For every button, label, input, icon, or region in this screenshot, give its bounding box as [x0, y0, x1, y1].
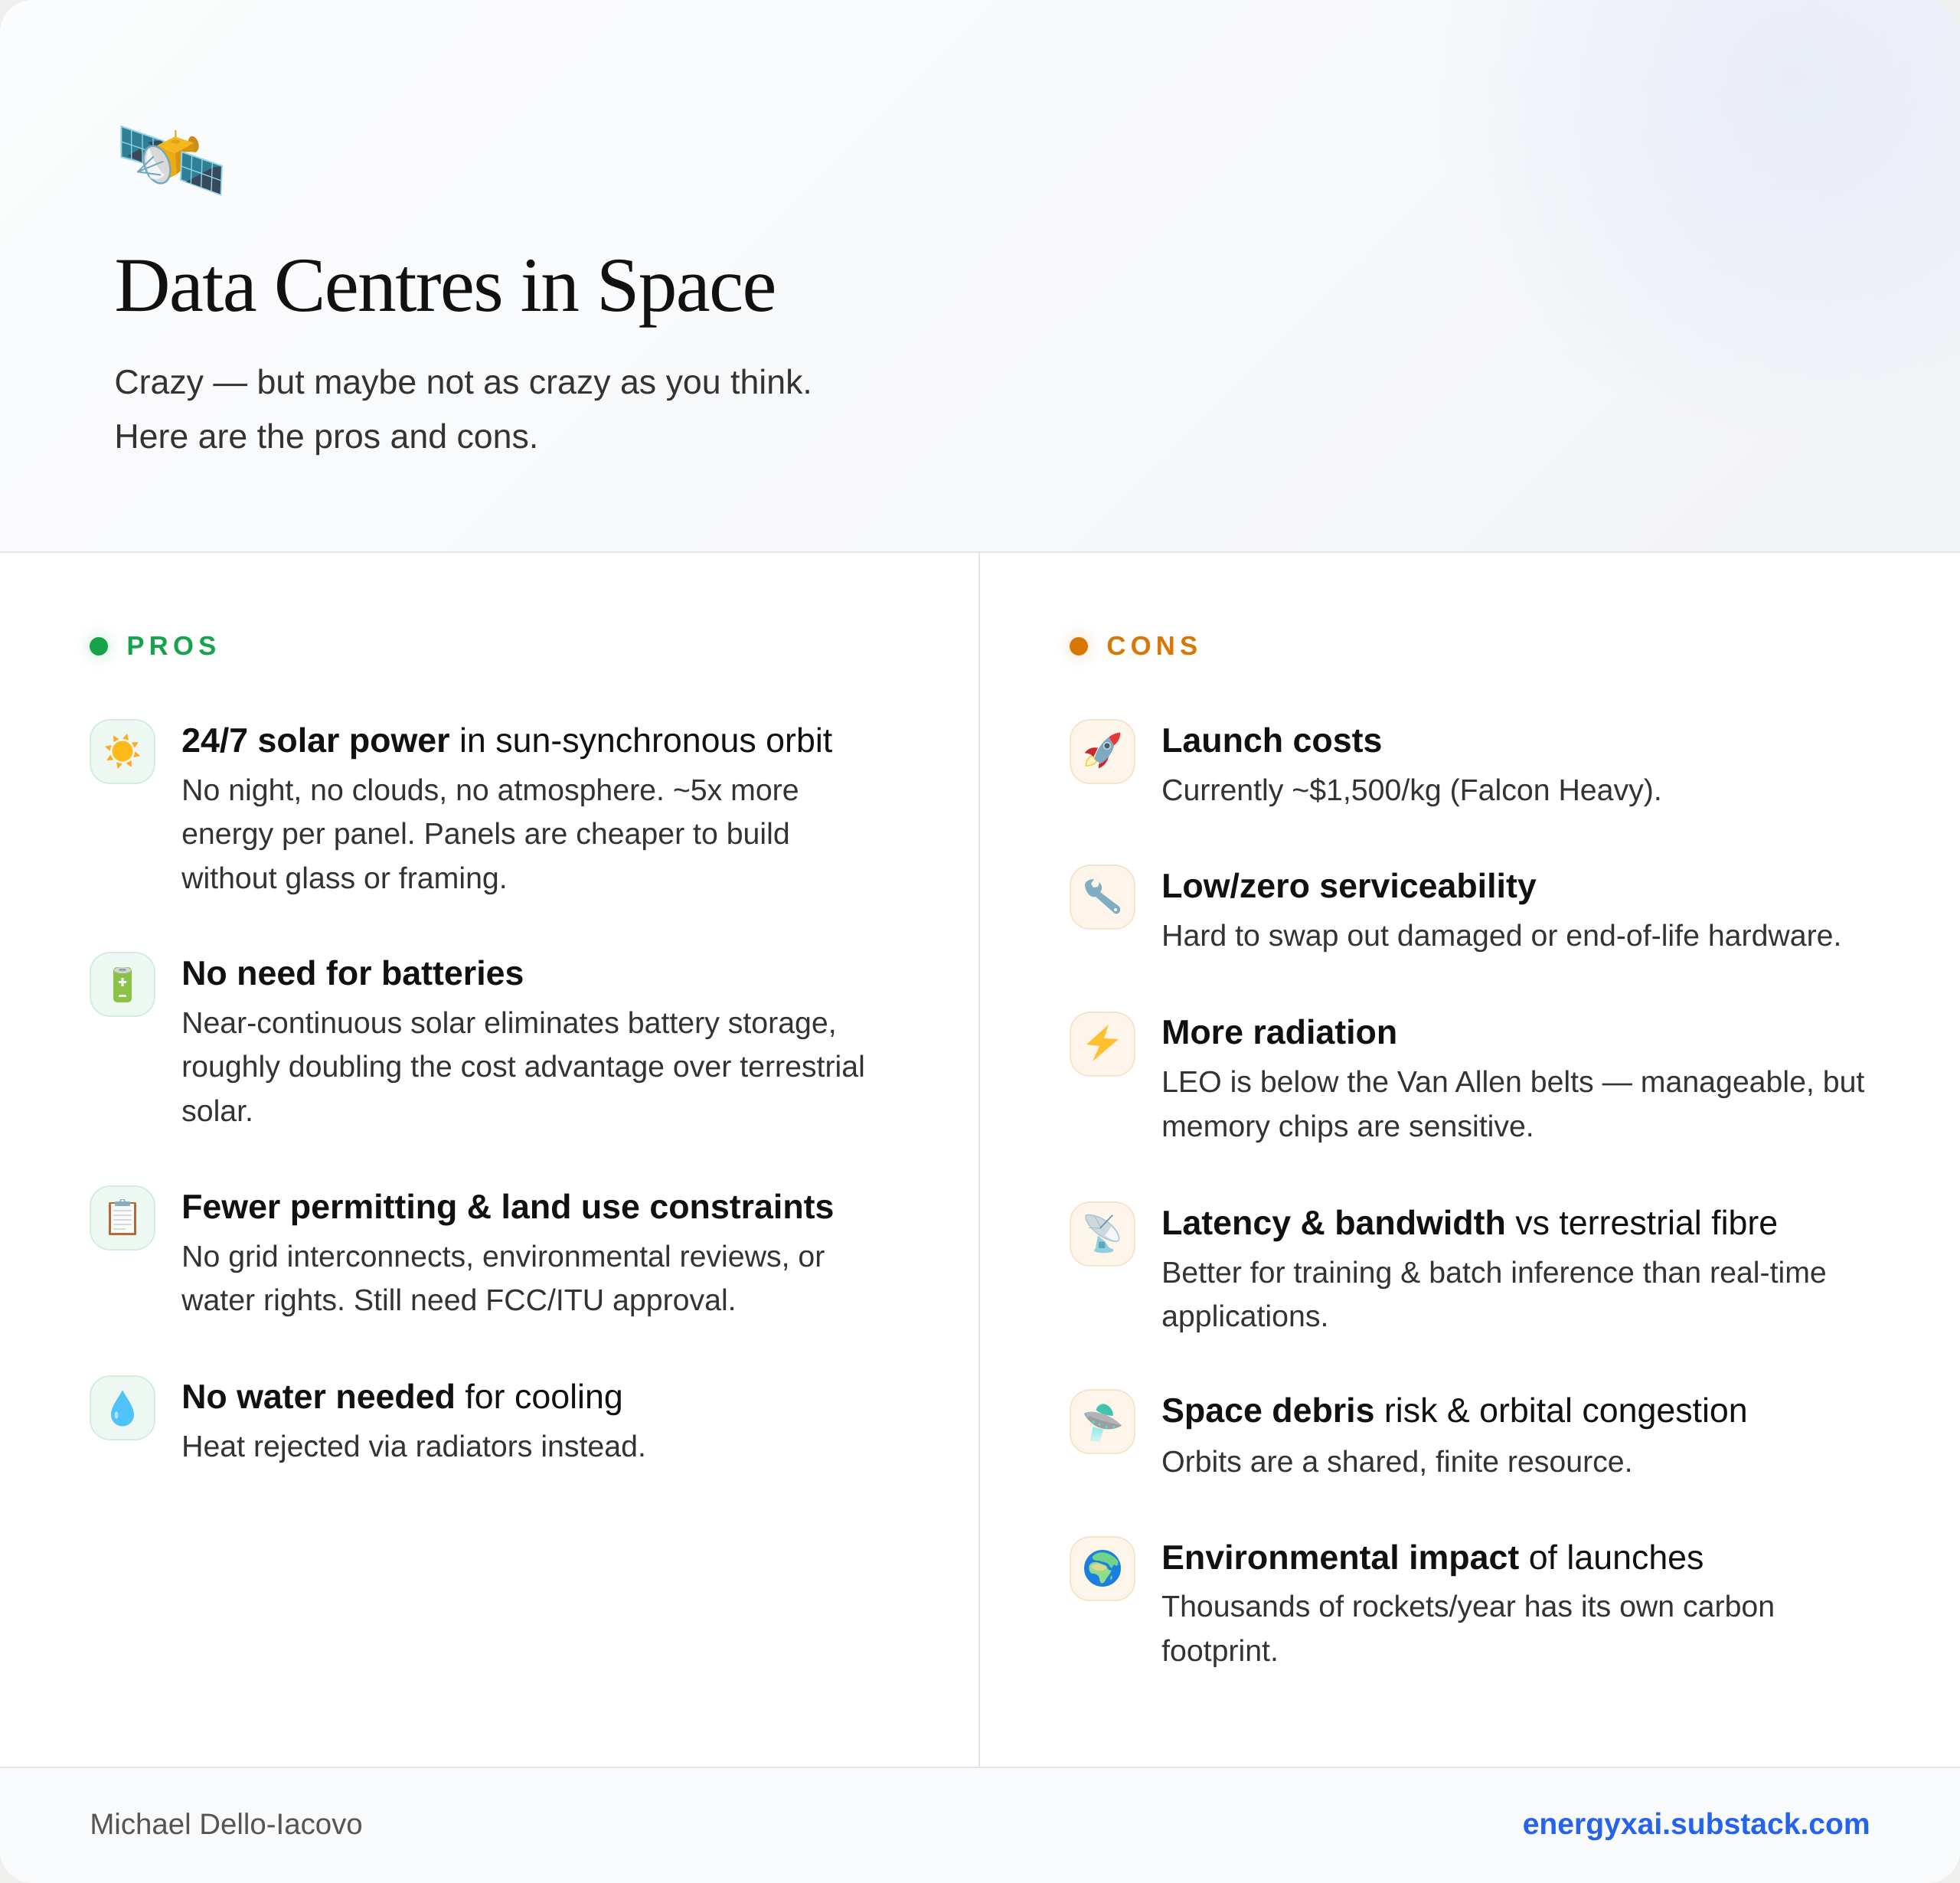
- cons dot: [1070, 637, 1088, 655]
- pros item 4 text: Heat rejected via radiators instead.: [181, 1430, 646, 1463]
- cons item 6 text: footprint.: [1161, 1634, 1279, 1668]
- cons heading: CONS: [1106, 632, 1202, 661]
- footer: [0, 1767, 1960, 1883]
- pros item 2 text: solar.: [181, 1094, 253, 1128]
- cons item 4: icon satellite dish: [1070, 1201, 1135, 1267]
- cons item 3 text: LEO is below the Van Allen belts — manageable, but: [1161, 1065, 1864, 1099]
- cons item 3 text: [1161, 1065, 1864, 1143]
- pros item 3 text: water rights. Still need FCC/ITU approval.: [181, 1283, 737, 1317]
- pros dot: [90, 637, 108, 655]
- title: Data Centres in Space: [114, 242, 776, 328]
- pros item 3: icon clipboard: [90, 1185, 155, 1250]
- subtitle: [114, 364, 812, 456]
- pros item 2 text: [181, 1006, 865, 1128]
- cons item 3: icon lightning: [1070, 1011, 1135, 1077]
- pros item 2 text: roughly doubling the cost advantage over terrestrial: [181, 1050, 865, 1084]
- cons item 4 text: Better for training & batch inference than real-time: [1161, 1256, 1827, 1290]
- pros heading: PROS: [126, 632, 221, 661]
- cons item 3 title: More radiation: [1161, 1014, 1397, 1051]
- header panel: [0, 0, 1960, 553]
- cons item 4 text: [1161, 1256, 1827, 1333]
- pros item 2 title: No need for batteries: [181, 955, 524, 992]
- cons item 6 text: [1161, 1590, 1775, 1668]
- pros item 4 title: No water needed for cooling: [181, 1378, 623, 1416]
- pros item 1 text: without glass or framing.: [181, 861, 508, 895]
- pros item 1 title: 24/7 solar power in sun-synchronous orbit: [181, 722, 832, 760]
- cons item 2 title: Low/zero serviceability: [1161, 868, 1537, 905]
- pros item 1 text: [181, 773, 799, 895]
- pros item 1 text: No night, no clouds, no atmosphere. ~5x more: [181, 773, 799, 807]
- cons item 5 title: Space debris risk & orbital congestion: [1161, 1392, 1748, 1430]
- pros item 3 text: [181, 1240, 825, 1317]
- cons item 5: icon flying saucer: [1070, 1389, 1135, 1454]
- pros item 2 text: Near-continuous solar eliminates battery storage,: [181, 1006, 837, 1040]
- pros item 3 title: Fewer permitting & land use constraints: [181, 1188, 834, 1226]
- pros item 4: icon water drop: [90, 1375, 155, 1440]
- pros item 3 text: No grid interconnects, environmental reviews, or: [181, 1240, 825, 1273]
- cons item 4 text: applications.: [1161, 1299, 1328, 1333]
- cons item 6 text: Thousands of rockets/year has its own carbon: [1161, 1590, 1775, 1623]
- subtitle: Crazy — but maybe not as crazy as you think.: [114, 364, 812, 401]
- cons item 6: icon globe: [1070, 1536, 1135, 1601]
- pros item 1: icon sun: [90, 719, 155, 784]
- cons item 2: icon wrench: [1070, 865, 1135, 930]
- footer author: Michael Dello-Iacovo: [90, 1808, 363, 1841]
- cons item 5 text: Orbits are a shared, finite resource.: [1161, 1445, 1633, 1479]
- cons item 1 text: Currently ~$1,500/kg (Falcon Heavy).: [1161, 773, 1662, 807]
- cons item 3 text: memory chips are sensitive.: [1161, 1110, 1534, 1143]
- footer link: energyxai.substack.com: [1523, 1808, 1870, 1841]
- pros item 2: icon battery: [90, 952, 155, 1017]
- panel: pros: [0, 553, 980, 1767]
- subtitle: Here are the pros and cons.: [114, 418, 538, 456]
- icon: satellite: [120, 126, 223, 196]
- cons item 1: icon rocket: [1070, 719, 1135, 784]
- cons item 6 title: Environmental impact of launches: [1161, 1539, 1704, 1577]
- cons item 1 title: Launch costs: [1161, 722, 1382, 760]
- cons item 4 title: Latency & bandwidth vs terrestrial fibre: [1161, 1205, 1778, 1242]
- pros item 1 text: energy per panel. Panels are cheaper to build: [181, 817, 790, 851]
- cons item 2 text: Hard to swap out damaged or end-of-life hardware.: [1161, 919, 1841, 953]
